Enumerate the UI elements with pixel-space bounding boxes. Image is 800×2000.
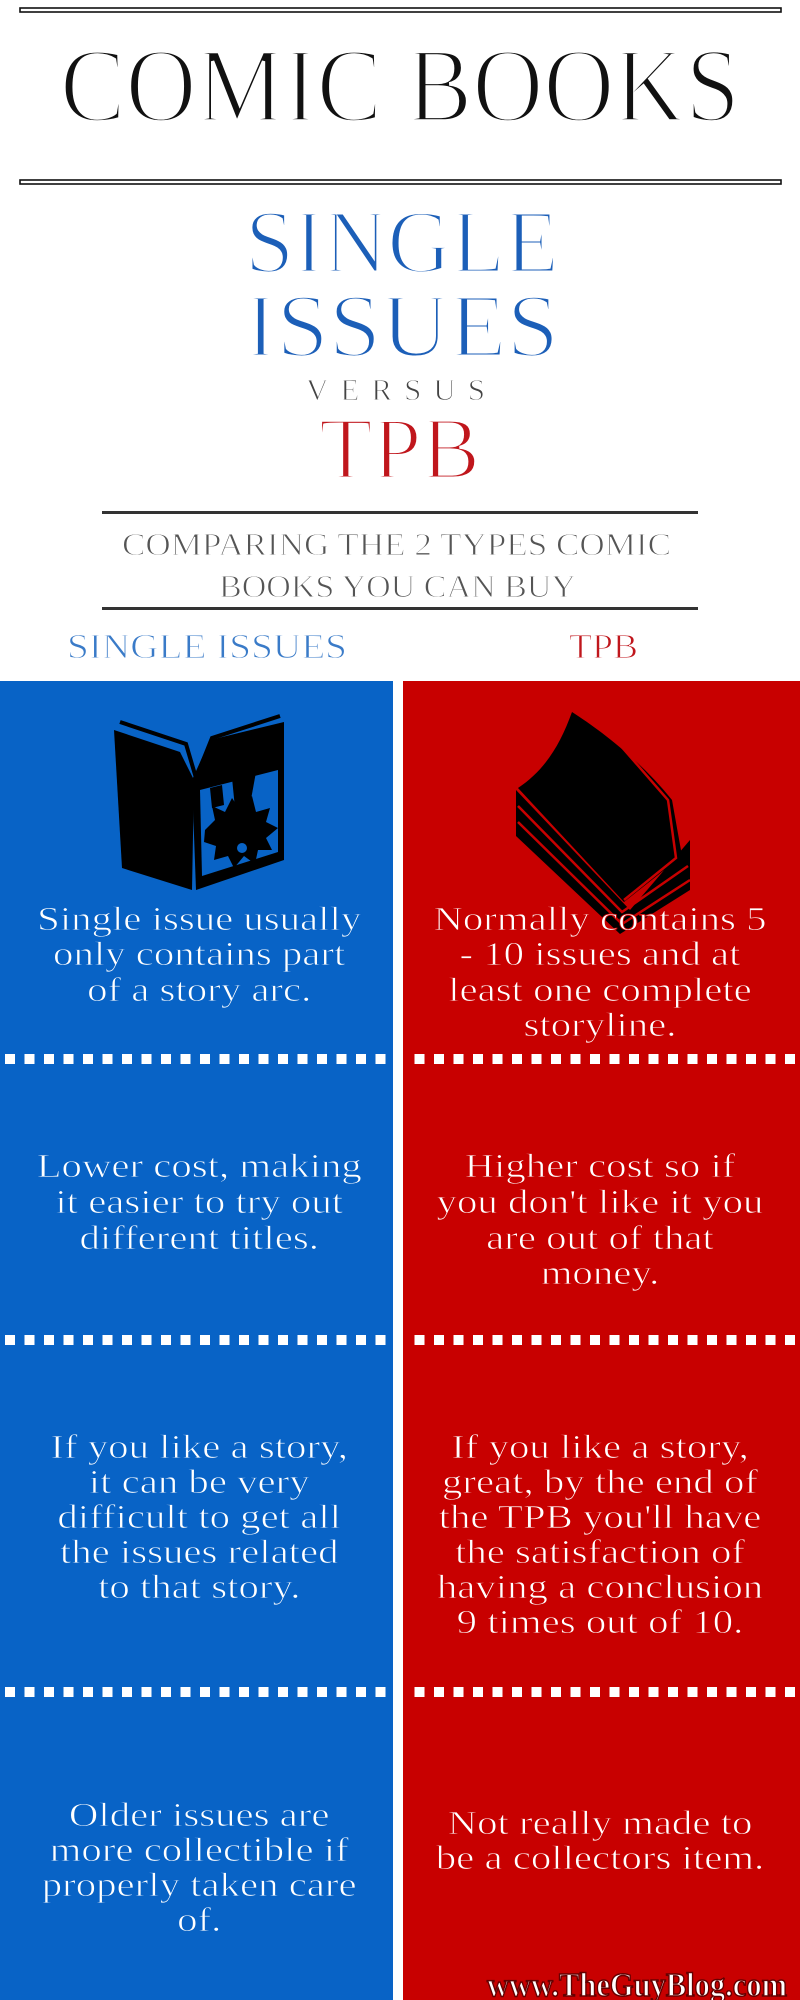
text block 4: Not really made to (448, 1805, 752, 1842)
subtitle: single issues (245, 193, 559, 376)
subtitle: TPB: TPB (319, 401, 480, 498)
text block 2: Lower cost, making (37, 1148, 362, 1185)
text block 3: 9 times out of 10. (457, 1604, 743, 1641)
versus: VERSUS (306, 372, 485, 407)
text block 1: only contains part (53, 936, 346, 973)
text block 4 (436, 1805, 764, 1877)
icon: comic book (114, 716, 284, 890)
text block 3: to that story. (98, 1569, 300, 1606)
text block 4: of. (177, 1902, 221, 1939)
subtitle: single issues: SINGLE (245, 193, 559, 292)
text block 3: the issues related (60, 1534, 339, 1571)
text block 3: difficult to get all (57, 1499, 341, 1536)
text block 4: properly taken care (42, 1867, 357, 1904)
text block 1: of a story arc. (87, 972, 311, 1009)
text block 2: you don't like it you (437, 1184, 764, 1221)
comparing heading: COMPARING THE 2 TYPES COMIC (122, 526, 671, 562)
text block 3 (437, 1429, 763, 1641)
text block 3: the TPB you'll have (439, 1499, 761, 1536)
text block 2 (37, 1148, 362, 1257)
text block 3: it can be very (89, 1464, 310, 1501)
text block 2: different titles. (79, 1220, 319, 1257)
panel: single issues column (0, 681, 393, 2000)
text block 1: least one complete (448, 972, 752, 1009)
text block 1 (433, 901, 767, 1044)
text block 3 (50, 1429, 348, 1606)
text block 1: storyline. (524, 1007, 676, 1044)
text block 3: If you like a story, (50, 1429, 348, 1466)
text block 4: be a collectors item. (436, 1840, 764, 1877)
text block 2: it easier to try out (55, 1184, 344, 1221)
text block 1: Single issue usually (37, 901, 361, 938)
text block 1 (37, 901, 361, 1009)
text block 3: having a conclusion (437, 1569, 763, 1606)
text block 4: more collectible if (50, 1832, 349, 1869)
second double rule (20, 180, 781, 184)
text block 4: Older issues are (69, 1797, 329, 1834)
text block 2 (437, 1148, 764, 1292)
text block 3: If you like a story, (451, 1429, 749, 1466)
text block 2: are out of that (486, 1220, 714, 1257)
text block 3: the satisfaction of (455, 1534, 746, 1571)
title: COMIC BOOKS (60, 27, 740, 144)
dotted separators (0, 1054, 800, 1697)
comparing heading (102, 511, 698, 610)
column label: single issues: SINGLE ISSUES (67, 627, 347, 666)
subtitle: single issues: ISSUES (245, 277, 559, 376)
text block 2: money. (541, 1255, 659, 1292)
text block 1: Normally contains 5 (433, 901, 767, 938)
panel: TPB column (403, 681, 800, 2000)
icon: trade paperback (516, 712, 690, 934)
text block 3: great, by the end of (442, 1464, 759, 1501)
text block 2: Higher cost so if (465, 1148, 736, 1185)
top double rule (20, 8, 781, 12)
column label: TPB: TPB (569, 627, 638, 666)
comparing heading: BOOKS YOU CAN BUY (219, 568, 576, 604)
text block 4 (42, 1797, 357, 1939)
text block 1: - 10 issues and at (460, 936, 741, 973)
